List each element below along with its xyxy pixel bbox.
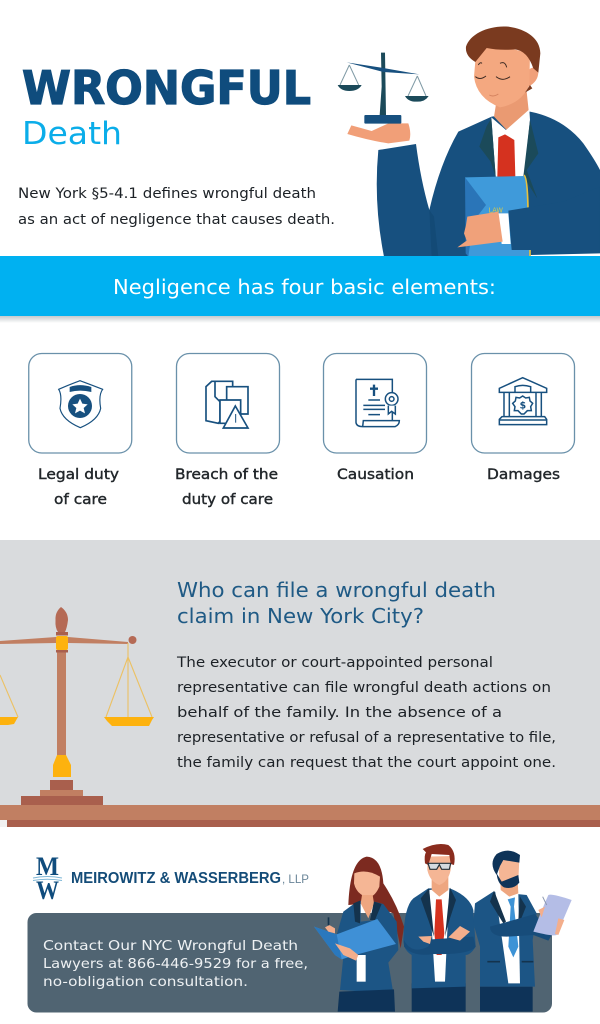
palm under scales [347, 123, 410, 143]
sleeve gap [429, 210, 438, 257]
logo mark [33, 852, 62, 905]
base steps [21, 796, 103, 805]
column [57, 652, 66, 756]
icon: certificate [356, 379, 399, 427]
card: causation: Causation [337, 467, 414, 483]
heading: claim in New York City? [177, 604, 424, 628]
lapels [479, 118, 538, 198]
illustration: lawyer holding scales: LAW [488, 207, 503, 215]
contact panel: Contact Our NYC Wrongful Death [43, 938, 298, 954]
logo mark: M [36, 852, 59, 881]
contact panel [28, 913, 552, 1012]
table [0, 805, 600, 820]
body text: representative or refusal of a representative to file, [177, 730, 556, 746]
woman [314, 857, 404, 1012]
closed eyes [475, 63, 510, 79]
logo [33, 852, 309, 905]
illustration: legal team [314, 844, 572, 1012]
holding hand [457, 212, 503, 247]
shadow under band [0, 316, 600, 323]
ear [527, 67, 538, 87]
body text: representative can file wrongful death actions on [177, 680, 551, 696]
banner [0, 256, 600, 316]
card: breach of the duty of care: duty of care [182, 492, 273, 508]
card: damages: Damages [487, 467, 560, 483]
book [465, 176, 530, 257]
icon: bank with dollar: $ [520, 400, 526, 411]
intro text [18, 186, 335, 228]
title [22, 61, 311, 152]
head [474, 43, 530, 107]
man with glasses [403, 844, 476, 1012]
body text: The executor or court-appointed personal [176, 655, 493, 671]
illustration: gold scales on table [0, 607, 600, 827]
logo: , LLP [282, 874, 309, 886]
card: legal duty of care: Legal duty [38, 467, 119, 483]
card: legal duty of care: of care [54, 492, 107, 508]
left pan [0, 675, 18, 717]
banner: Negligence has four basic elements: [113, 275, 496, 299]
cuff [498, 213, 511, 244]
shirt [491, 109, 530, 177]
intro text: New York §5-4.1 defines wrongful death [18, 186, 316, 202]
body text [176, 655, 556, 771]
card: damages [472, 354, 574, 483]
card: breach of the duty of care [175, 354, 280, 508]
finial [55, 607, 68, 632]
heading [177, 578, 496, 628]
card: causation [324, 354, 426, 483]
title: WRONGFUL [22, 61, 311, 115]
bearded man [473, 851, 572, 1012]
title: Death [22, 116, 122, 152]
logo mark: W [36, 876, 59, 905]
neck [494, 92, 529, 130]
lower sleeve [508, 187, 600, 250]
panel: who can file [0, 540, 600, 827]
scales [338, 53, 429, 124]
icon: documents with warning [206, 381, 248, 428]
heading: Who can file a wrongful death [177, 578, 496, 602]
card: legal duty of care [29, 354, 132, 508]
hair [466, 26, 540, 73]
icon: police badge [59, 381, 103, 428]
right pan [106, 643, 152, 717]
beam [0, 637, 128, 644]
body text: behalf of the family. In the absence of a [177, 705, 502, 721]
illustration: lawyer holding scales [338, 26, 600, 257]
body text: the family can request that the court appoint one. [177, 755, 556, 771]
contact panel: Lawyers at 866-446-9529 for a free, [43, 956, 308, 972]
intro text: as an act of negligence that causes death. [18, 212, 335, 228]
contact panel: no-obligation consultation. [43, 974, 248, 990]
logo: MEIROWITZ & WASSERBERG [71, 870, 281, 887]
card: breach of the duty of care: Breach of the [175, 467, 278, 483]
jacket [377, 112, 600, 257]
tie [497, 134, 515, 177]
